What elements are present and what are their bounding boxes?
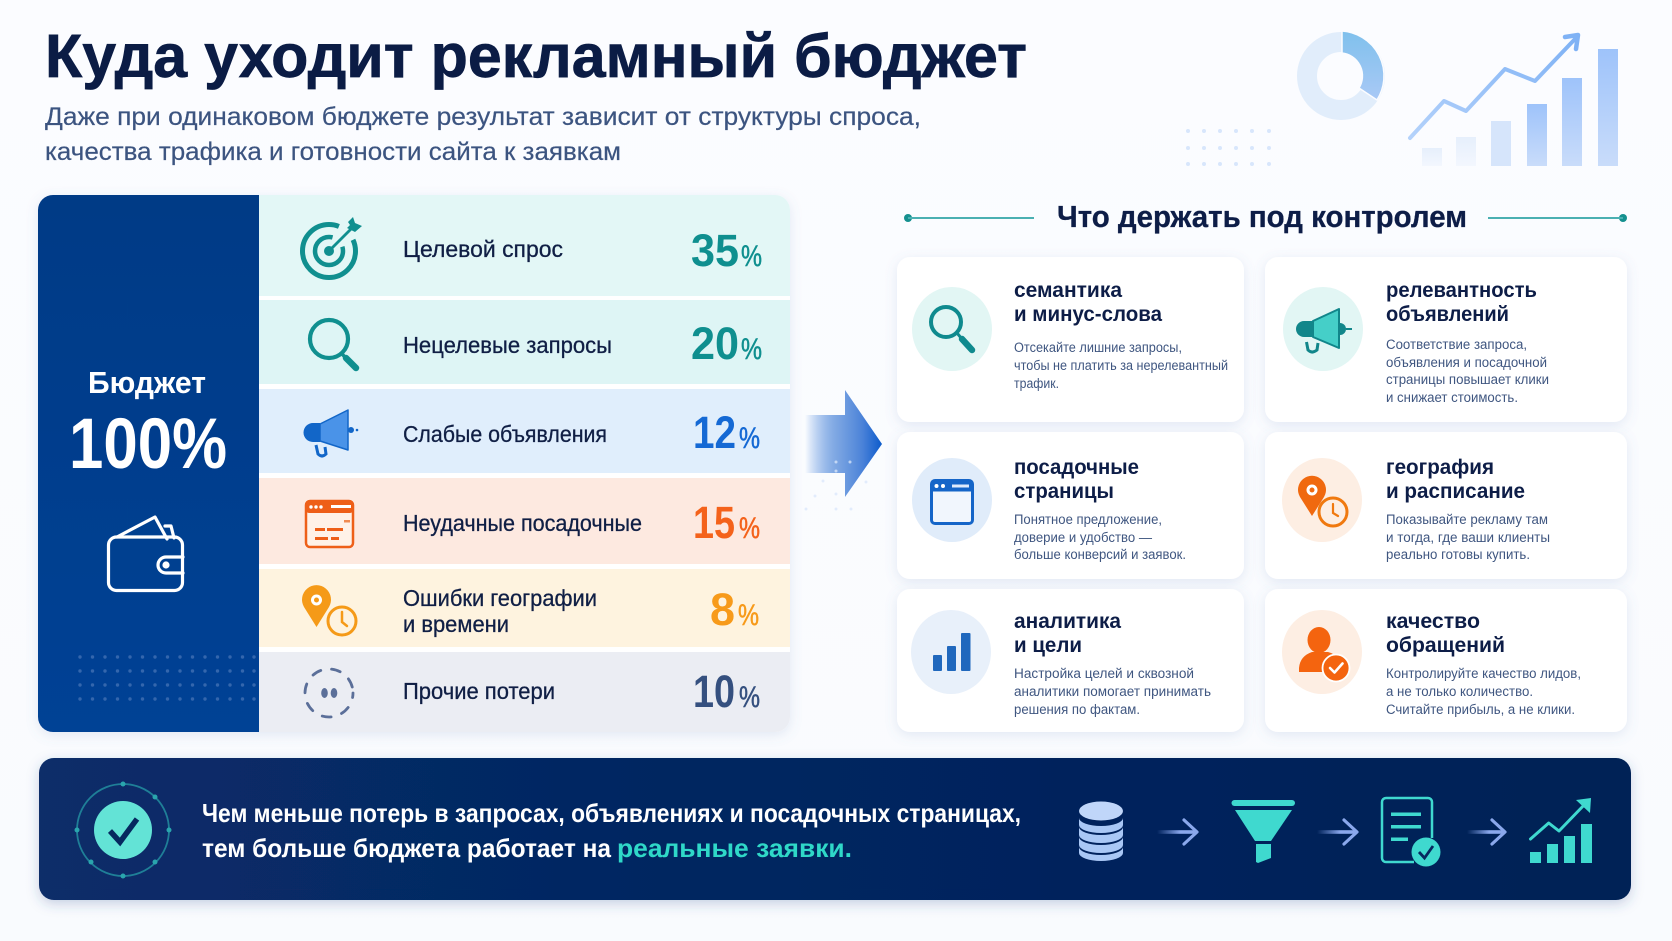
row value: 8%: 8 xyxy=(710,584,735,635)
row value: 8% xyxy=(710,584,759,635)
row label: non-target queries: Нецелевые запросы xyxy=(403,332,612,358)
row label: other losses: Прочие потери xyxy=(403,678,555,704)
row value: 35%: 35 xyxy=(691,225,739,276)
decoration: donut chart xyxy=(1307,31,1384,110)
budget value: 100% xyxy=(69,405,227,484)
card: semantics: чтобы не платить за нерелевантный xyxy=(1014,358,1228,373)
icon: browser xyxy=(932,480,972,524)
row label: geography and time errors xyxy=(403,585,597,637)
row value: 8%: % xyxy=(738,599,759,632)
card: geography and schedule: география xyxy=(1386,456,1494,479)
card: lead quality: качество xyxy=(1386,610,1480,633)
banner text: Чем меньше потерь в запросах, объявлениях и посадочных страницах, xyxy=(202,798,1021,828)
arrow: step 2 xyxy=(1317,820,1357,844)
arrow: step 1 xyxy=(1157,820,1197,844)
card: geography and schedule: Показывайте рекламу там xyxy=(1386,512,1548,527)
card: lead quality: Считайте прибыль, а не клики. xyxy=(1386,702,1575,717)
card: lead quality: обращений xyxy=(1386,634,1505,657)
row value: 35%: % xyxy=(741,240,762,273)
card: landing pages: больше конверсий и заявок. xyxy=(1014,547,1186,562)
card: semantics: и минус-слова xyxy=(1014,303,1162,326)
row label: weak ads: Слабые объявления xyxy=(403,421,607,447)
card: analytics and goals: Настройка целей и сквозной xyxy=(1014,666,1194,681)
row label: target demand: Целевой спрос xyxy=(403,236,563,262)
row value: 10%: 10 xyxy=(693,666,735,717)
icon: database xyxy=(1079,802,1123,861)
card: analytics and goals: аналитика xyxy=(1014,610,1121,633)
card: geography and schedule xyxy=(1265,432,1627,579)
row value: 20%: % xyxy=(741,333,762,366)
card: ad relevance: объявления и посадочной xyxy=(1386,355,1547,370)
card: landing pages xyxy=(897,432,1244,579)
icon: pin and clock xyxy=(1298,476,1347,526)
heading: what to control xyxy=(904,200,1627,234)
card: ad relevance: и снижает стоимость. xyxy=(1386,390,1518,405)
card: analytics and goals: аналитики помогает принимать xyxy=(1014,684,1211,699)
subtitle xyxy=(45,103,921,166)
banner text: тем больше бюджета работает на xyxy=(202,833,612,863)
subtitle: качества трафика и готовности сайта к заявкам xyxy=(45,138,621,166)
panel: budget breakdown xyxy=(38,195,790,732)
arrow: budget to control list xyxy=(804,390,882,510)
card: ad relevance xyxy=(1265,257,1627,422)
arrow: step 3 xyxy=(1467,820,1505,844)
card: semantics: Отсекайте лишние запросы, xyxy=(1014,340,1182,355)
icon: bar chart xyxy=(933,633,970,671)
card: analytics and goals: и цели xyxy=(1014,634,1082,657)
card: ad relevance: объявлений xyxy=(1386,303,1509,326)
icon: wallet xyxy=(108,517,183,590)
row value: 15%: 15 xyxy=(693,497,735,548)
card: semantics: семантика xyxy=(1014,279,1122,302)
row value: 12%: 12 xyxy=(693,407,736,458)
icon: pin and clock xyxy=(302,585,356,635)
card: landing pages: страницы xyxy=(1014,480,1114,503)
card: landing pages: Понятное предложение, xyxy=(1014,512,1162,527)
row value: 20%: 20 xyxy=(691,318,739,369)
icon: landing page xyxy=(306,501,353,547)
card: analytics and goals xyxy=(897,589,1244,732)
icon: magnifier xyxy=(931,307,972,350)
card: semantics xyxy=(897,257,1244,422)
icon: dashed circle xyxy=(305,669,353,717)
row value: 10%: % xyxy=(739,681,760,714)
row value: 15%: % xyxy=(739,512,760,545)
card: ad relevance: релевантность xyxy=(1386,279,1537,302)
icon: check badge xyxy=(74,782,172,878)
banner: conclusion xyxy=(39,758,1631,900)
icon: person with check xyxy=(1299,627,1350,682)
card: geography and schedule: реально готовы купить. xyxy=(1386,547,1530,562)
banner text xyxy=(202,798,1021,863)
icon: funnel xyxy=(1232,800,1295,863)
budget label: Бюджет xyxy=(88,365,206,400)
card: landing pages: посадочные xyxy=(1014,456,1139,479)
icon: target xyxy=(302,217,362,278)
decoration: growth bars and arrow xyxy=(1410,35,1618,166)
icon: megaphone xyxy=(1296,309,1352,352)
card: geography and schedule: и тогда, где ваши клиенты xyxy=(1386,530,1550,545)
card: geography and schedule: и расписание xyxy=(1386,480,1525,503)
card: lead quality: Контролируйте качество лидов, xyxy=(1386,666,1581,681)
banner text: реальные заявки. xyxy=(617,833,852,863)
decoration: panel dots xyxy=(78,655,256,701)
icon: growth chart xyxy=(1530,798,1592,863)
title: Куда уходит рекламный бюджет xyxy=(45,22,1027,90)
row label: bad landing pages: Неудачные посадочные xyxy=(403,510,642,536)
subtitle: Даже при одинаковом бюджете результат зависит от структуры спроса, xyxy=(45,103,921,131)
icon: document with check xyxy=(1382,798,1440,866)
card: landing pages: доверие и удобство — xyxy=(1014,530,1152,545)
row value: 12%: % xyxy=(739,422,760,455)
card: lead quality: а не только количество. xyxy=(1386,684,1533,699)
card: ad relevance: Соответствие запроса, xyxy=(1386,337,1527,352)
card: semantics: трафик. xyxy=(1014,376,1059,391)
row label: geography and time errors: Ошибки географии xyxy=(403,585,597,611)
card: lead quality xyxy=(1265,589,1627,732)
card: ad relevance: страницы повышает клики xyxy=(1386,372,1549,387)
icon: magnifier xyxy=(310,320,356,368)
card: analytics and goals: решения по фактам. xyxy=(1014,702,1140,717)
row label: geography and time errors: и времени xyxy=(403,611,509,637)
icon: megaphone xyxy=(304,410,358,456)
heading text: Что держать под контролем xyxy=(1057,200,1467,234)
decoration: dot grid xyxy=(1186,129,1271,166)
